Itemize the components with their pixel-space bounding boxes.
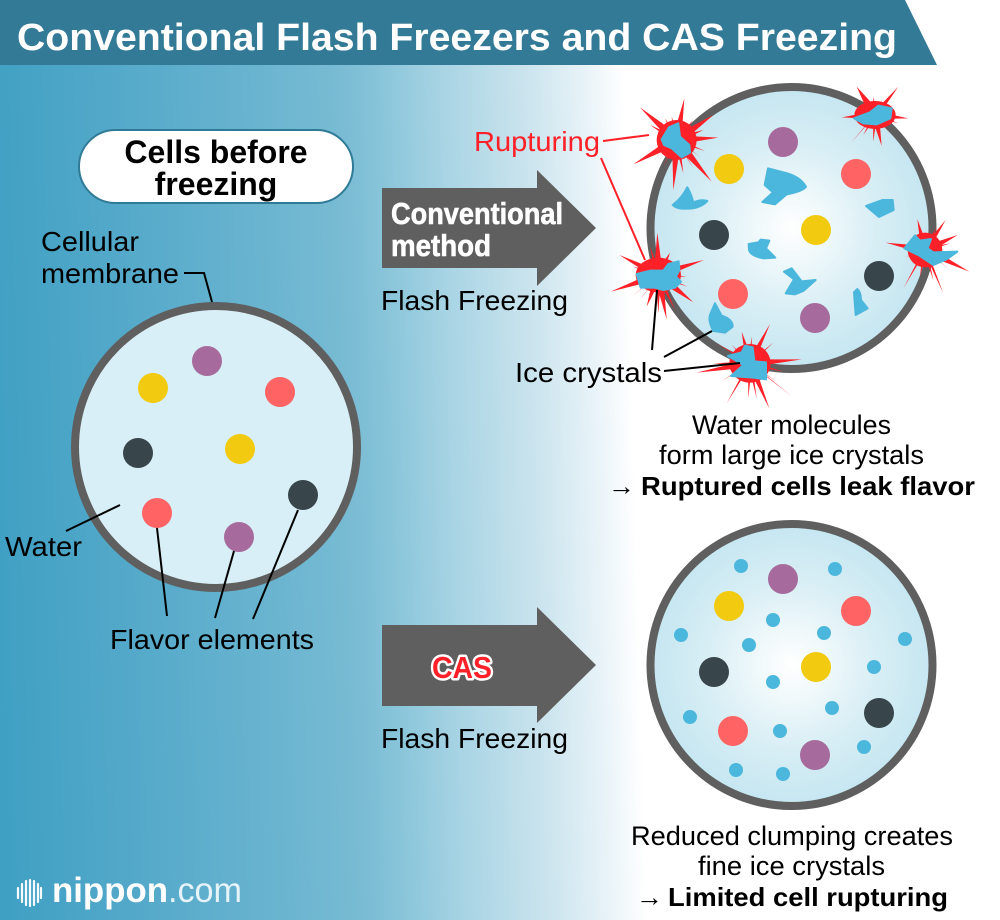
label: flavor elements: Flavor elements	[110, 624, 314, 655]
logo: nippon.com: .com	[168, 871, 242, 910]
lower right cell: CAS freezing result	[650, 524, 932, 806]
caption: CAS result: →	[636, 882, 663, 912]
label: ice crystals: Ice crystals	[515, 357, 662, 388]
left cell before freezing	[75, 306, 357, 588]
heading pill: cells before freezing	[79, 130, 353, 203]
label: rupturing	[474, 126, 649, 260]
caption: conventional result: Water molecules	[692, 410, 891, 440]
ice crystals and ruptures	[611, 87, 969, 408]
caption: conventional result: Ruptured cells leak flavor	[641, 471, 975, 501]
label: rupturing: Rupturing	[474, 126, 600, 157]
arrow: CAS	[382, 607, 596, 723]
arrow: conventional method: Conventional	[391, 196, 563, 231]
caption: CAS result: fine ice crystals	[698, 851, 885, 881]
label: flash freezing (conventional): Flash Freezing	[381, 285, 568, 316]
logo: nippon.com: nippon	[52, 871, 168, 910]
title banner	[0, 0, 937, 65]
heading pill: cells before freezing: freezing	[155, 166, 277, 202]
fine ice crystals	[674, 559, 912, 781]
caption: CAS result: Reduced clumping creates	[631, 821, 953, 851]
caption: CAS result: Limited cell rupturing	[668, 882, 948, 912]
label: cellular membrane: membrane	[41, 258, 179, 289]
label: water	[5, 505, 120, 562]
upper right cell: conventional freezing result	[611, 87, 969, 408]
label: cellular membrane: Cellular	[41, 226, 139, 257]
label: flash freezing (CAS): Flash Freezing	[381, 723, 568, 754]
caption: CAS result	[631, 821, 953, 912]
label: cellular membrane	[41, 226, 212, 302]
label: water: Water	[5, 531, 82, 562]
title banner: Conventional Flash Freezers and CAS Freezing	[17, 17, 897, 59]
logo: nippon.com	[18, 871, 242, 910]
arrow: conventional method	[382, 170, 596, 286]
arrow: CAS: CAS	[432, 650, 492, 685]
heading pill: cells before freezing: Cells before	[124, 134, 308, 170]
caption: conventional result: form large ice crystals	[659, 440, 924, 470]
arrow: conventional method: method	[391, 228, 491, 263]
label: flavor elements	[110, 510, 314, 655]
label: ice crystals	[515, 290, 740, 388]
caption: conventional result: →	[608, 471, 635, 501]
caption: conventional result	[608, 410, 975, 501]
